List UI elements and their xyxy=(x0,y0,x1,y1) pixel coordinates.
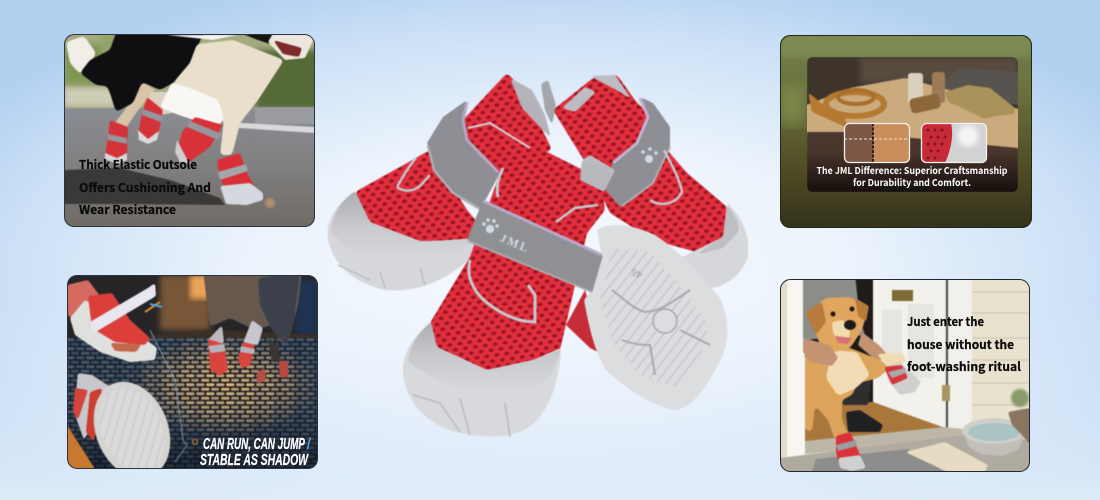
sole shoe xyxy=(74,373,112,440)
panel: foot-washing ritual xyxy=(780,275,1030,472)
card: craftsmanship photo xyxy=(804,57,1022,192)
strap xyxy=(467,200,603,293)
plant xyxy=(1008,408,1030,445)
left siding xyxy=(781,282,786,457)
dog chest white xyxy=(173,40,284,155)
text: can run can jump: CAN RUN, CAN JUMP / xyxy=(203,436,311,453)
shoe 2 xyxy=(138,97,163,143)
dog xyxy=(805,345,890,440)
text: can run can jump: STABLE AS SHADOW xyxy=(200,452,309,469)
shoe: sole up xyxy=(584,225,727,410)
blurred far shoe xyxy=(68,280,100,318)
small red behind sole xyxy=(566,290,604,355)
paw logo right xyxy=(641,147,658,163)
dog tail xyxy=(66,36,96,74)
caption: JML difference xyxy=(816,166,1008,188)
shoe 1 xyxy=(105,120,128,162)
caption: JML difference: for Durability and Comfort. xyxy=(853,175,971,189)
inset: leather stitch xyxy=(844,123,910,163)
door xyxy=(873,279,945,427)
shoe 3 xyxy=(177,117,223,163)
shoe: back right xyxy=(553,75,748,288)
inset: mesh and silver xyxy=(921,123,987,163)
foot shoe xyxy=(836,432,862,462)
panel: can run can jump xyxy=(67,275,318,469)
text: thick elastic outsole xyxy=(79,156,211,218)
dog head xyxy=(244,35,273,44)
panel: JML difference xyxy=(780,35,1032,228)
product: JML shoes xyxy=(328,73,748,437)
shoe: back left xyxy=(328,73,556,290)
towel xyxy=(905,442,988,472)
mat xyxy=(805,402,945,442)
shoe 4 xyxy=(217,153,255,188)
shoe: front centre xyxy=(403,150,612,437)
text: thick elastic outsole: Wear Resistance xyxy=(79,201,176,218)
tab xyxy=(580,160,612,192)
text: thick elastic outsole: Thick Elastic Outsole xyxy=(79,156,197,173)
dog xyxy=(203,276,302,343)
bowl xyxy=(966,436,1024,456)
paw logo xyxy=(482,218,499,233)
dog back leg xyxy=(115,83,154,127)
spools xyxy=(908,73,923,104)
text: thick elastic outsole: Offers Cushioning And xyxy=(79,179,211,196)
text: foot-washing ritual xyxy=(907,313,1021,375)
caption: JML difference: The JML Difference: Superior Craftsmanship xyxy=(816,163,1008,177)
panel: thick elastic outsole xyxy=(64,30,320,227)
dog body black xyxy=(80,30,205,112)
logo text: JML xyxy=(498,231,532,256)
siding right xyxy=(972,279,1030,429)
human hand xyxy=(803,338,838,366)
tape measure xyxy=(826,92,884,116)
shoe: sole up: 46 xyxy=(628,265,644,283)
wire xyxy=(150,330,187,462)
person xyxy=(803,275,865,340)
text: foot-washing ritual: Just enter the xyxy=(907,313,984,330)
gloves xyxy=(945,85,1015,119)
text: can run can jump xyxy=(200,436,311,469)
dark foreground xyxy=(807,131,1018,166)
text: foot-washing ritual: foot-washing ritual xyxy=(907,358,1021,375)
interior xyxy=(805,279,875,409)
raised shoe xyxy=(885,362,921,395)
lifted shoe upper xyxy=(88,293,150,345)
dog thigh xyxy=(160,82,224,125)
text: foot-washing ritual: house without the xyxy=(907,336,1014,353)
lifted shoe sole xyxy=(70,300,157,362)
